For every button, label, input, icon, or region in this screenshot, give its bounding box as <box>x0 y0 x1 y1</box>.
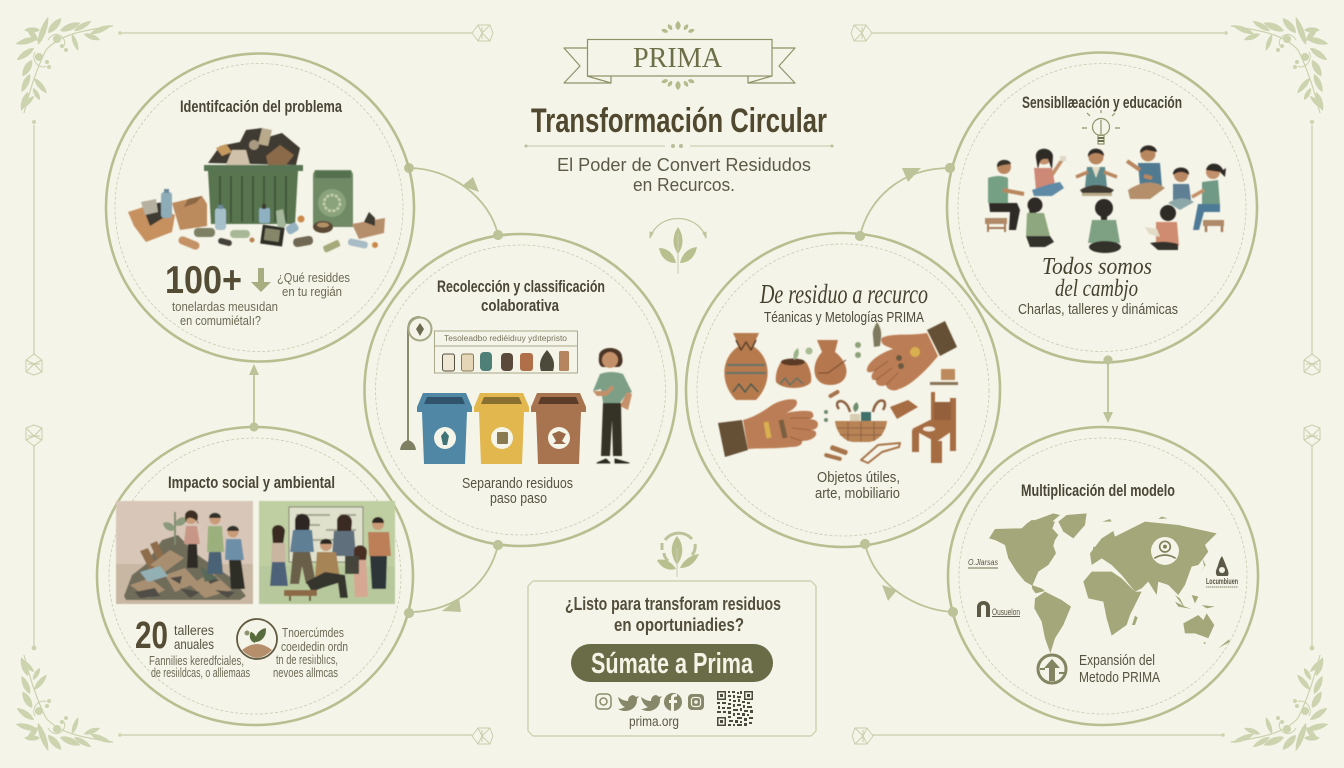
connector arrow: step 4 to 5 <box>855 163 955 241</box>
social icons <box>596 693 704 711</box>
caption: separando residuos: paso paso <box>490 490 547 507</box>
partner logo: top left: O.Jlarsas <box>968 558 998 567</box>
illustration: overflowing dumpster and waste <box>128 128 385 253</box>
subtitle <box>557 155 811 195</box>
bin: blue <box>417 393 472 464</box>
text: families benefited: Fannilies keredfciales, <box>149 654 244 668</box>
icon: circular leaf top <box>650 218 706 274</box>
illustration: scattered wood scraps <box>824 369 958 463</box>
sign post <box>400 317 432 450</box>
icon: down arrow <box>251 268 271 292</box>
script tagline: Todos somos <box>1042 254 1152 280</box>
icon: expansion arrow badge <box>1038 655 1066 683</box>
illustration: open hand <box>718 399 818 457</box>
figure: woman sorting waste <box>593 348 632 463</box>
illustration: clay pots <box>724 333 861 400</box>
title: Transformación Circular <box>531 102 827 140</box>
icon: sprout with ring bottom <box>657 533 699 577</box>
text: residue question: ¿Qué residdes <box>277 271 350 285</box>
illustration: before, people by waste pile <box>116 501 253 604</box>
heading: recolección: colaborativa <box>481 297 560 315</box>
text: tonnes label <box>172 300 278 328</box>
text: tonnes label: en comumiétaIı? <box>180 314 261 328</box>
stat: 20 talleres <box>135 615 214 657</box>
panel: call to action <box>528 581 816 736</box>
caption: objetos útiles: arte, mobiliario <box>815 485 900 502</box>
panel: multiplicación del modelo <box>948 427 1258 725</box>
text: residue question <box>277 271 350 299</box>
subtitle: El Poder de Convert Residudos <box>557 155 811 175</box>
caption: expansión del método: Expansión del <box>1079 652 1155 669</box>
stat: 100+: 100+ <box>165 259 242 302</box>
website: prima.org <box>629 713 679 729</box>
partner logo: right: Locumbiuen <box>1206 577 1238 586</box>
cta button <box>571 644 773 682</box>
caption: expansión del método: Metodo PRIMA <box>1079 669 1160 686</box>
cta question <box>565 594 781 635</box>
stat: 20 talleres: anuales <box>174 636 214 652</box>
cta button: Súmate a Prima <box>591 648 754 680</box>
text: tonnes label: tonelardas meusıdan <box>172 300 278 314</box>
subtitle: en Recurcos. <box>633 175 735 195</box>
heading: recolección: Recolección y classificación <box>437 278 605 296</box>
decorative corner: top right <box>1231 16 1329 113</box>
script tagline: del cambjo <box>1055 276 1138 302</box>
caption: charlas: Charlas, talleres y dinámicas <box>1018 301 1178 318</box>
panel: identificación del problema <box>106 54 414 362</box>
caption: objetos útiles: Objetos útiles, <box>817 469 900 486</box>
panel: sensibilización y educación <box>945 52 1257 364</box>
illustration: hand holding clay <box>867 321 957 390</box>
banner: PRIMA ribbon <box>564 21 795 90</box>
illustration: woven basket <box>835 400 887 442</box>
illustration: after, community working together <box>259 501 395 604</box>
partner logo: right <box>1206 556 1238 587</box>
text: opportunities <box>273 626 348 680</box>
icon: light bulb <box>1082 110 1120 144</box>
bin: brown <box>531 393 586 464</box>
connector arrow: step 2 to 3 <box>404 540 503 618</box>
heading: identificación: Identifcación del problema <box>180 98 343 116</box>
connector arrow: step 1 to 2 <box>404 163 503 240</box>
panel: de residuo a recurso <box>686 231 1000 549</box>
caption: expansión del método <box>1079 652 1160 686</box>
text: families benefited: de resiıldcas, o alliemaas <box>151 666 250 680</box>
bin: yellow <box>474 393 529 464</box>
connector arrow: step 6 to 4 <box>860 539 958 617</box>
partner logo: bottom left: Ousuelon <box>992 607 1020 617</box>
panel: recolección y clasificación <box>364 230 676 550</box>
cta question: en oportuniadies? <box>614 615 744 635</box>
heading: impacto: Impacto social y ambiental <box>168 474 335 492</box>
QR code <box>716 691 753 726</box>
connector arrow: step 5 to 6 <box>1103 356 1113 423</box>
heading: sensibilización: Sensibllæación y educación <box>1022 94 1182 112</box>
script tagline <box>1042 254 1152 302</box>
stat: 20 talleres: 20 <box>135 615 168 657</box>
subheading: Téanicas y Metologías PRIMA <box>764 309 924 326</box>
stat: 20 talleres: talleres <box>174 622 214 638</box>
text: opportunities: coeıdedin ordn <box>281 640 348 654</box>
icon: sprout badge <box>237 619 277 659</box>
text: residue question: en tu regián <box>282 285 342 299</box>
decorative corner: bottom left <box>15 655 113 752</box>
sorting guide board <box>434 331 578 373</box>
partner logo: bottom left <box>977 601 1020 617</box>
caption: separando residuos: Separando residuos <box>462 475 573 492</box>
caption: separando residuos <box>462 475 573 507</box>
text: opportunities: tn de resiıblıcs, <box>276 653 338 667</box>
text: opportunities: nevoes allmcas <box>273 666 338 680</box>
sorting guide board: Tesoleadbo rediéidıuy ydıtepristo <box>444 333 567 343</box>
decorative corner: bottom right <box>1231 655 1329 752</box>
heading: multiplicación: Multiplicación del modelo <box>1021 482 1175 500</box>
title divider <box>524 144 834 148</box>
caption: objetos útiles <box>815 469 900 502</box>
connector arrow: step 3 to 1 <box>249 364 259 432</box>
text: opportunities: Tnoercúmdes <box>282 626 344 640</box>
decorative corner: top left <box>15 16 113 113</box>
banner: PRIMA ribbon: PRIMA <box>633 43 723 74</box>
cta question: ¿Listo para transforam residuos <box>565 594 781 614</box>
illustration: community circle <box>985 145 1226 253</box>
panel: impacto social y ambiental <box>97 422 414 725</box>
heading: recolección <box>437 278 605 315</box>
illustration: wooden chair <box>912 392 956 463</box>
script heading: De residuo a recurco <box>759 279 928 309</box>
world map <box>982 513 1230 653</box>
text: families benefited <box>149 654 250 680</box>
